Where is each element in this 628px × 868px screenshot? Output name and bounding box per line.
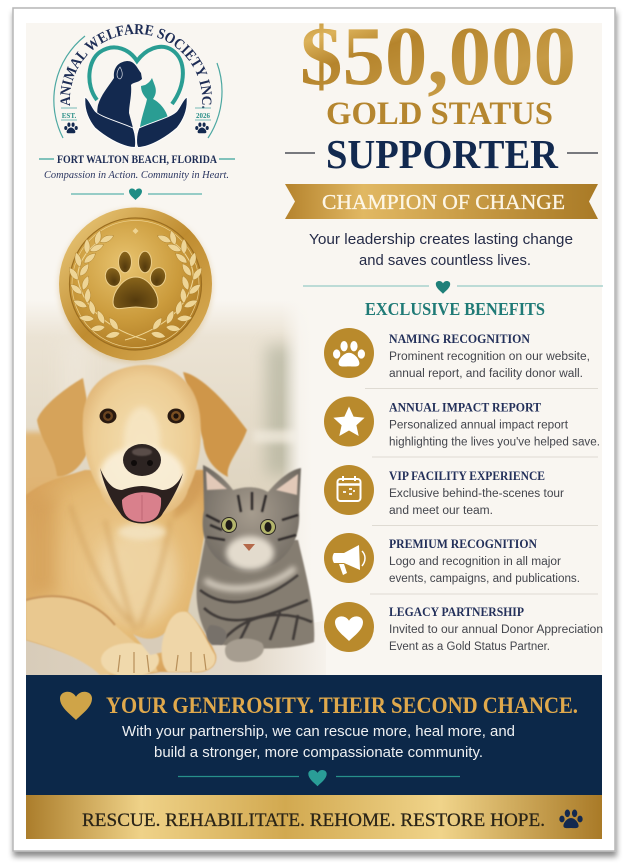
blanket between legs [133, 632, 166, 655]
banner text [122, 723, 515, 761]
logo est: 2026 [196, 112, 210, 120]
photo: golden retriever and tabby cat [22, 300, 326, 677]
benefit: legacy partnership: Invited to our annual Donor Appreciation [389, 624, 603, 636]
banner text: With your partnership, we can rescue more, heal more, and [122, 723, 515, 740]
logo est: EST. [62, 112, 76, 120]
gold medal [58, 208, 212, 363]
icon: heart [335, 616, 363, 641]
benefit: vip facility experience: Exclusive behind-the-scenes tour [389, 488, 564, 500]
logo cat [140, 78, 169, 127]
cat [197, 465, 314, 662]
leadership statement: Your leadership creates lasting change [309, 231, 573, 248]
benefit: naming recognition: NAMING RECOGNITION [389, 332, 530, 346]
benefit: premium recognition [324, 533, 580, 585]
dog head [83, 365, 201, 518]
dog eyes [100, 408, 116, 424]
benefit: vip facility experience: and meet our team. [389, 505, 493, 517]
medal paw [103, 251, 168, 309]
banner text: build a stronger, more compassionate community. [154, 744, 483, 761]
medal laurel [67, 230, 146, 340]
banner heading: YOUR GENEROSITY. THEIR SECOND CHANCE. [106, 693, 578, 718]
title: $50,000: $50,000 [300, 10, 576, 103]
benefit: annual impact report: ANNUAL IMPACT REPORT [389, 400, 542, 414]
gold motto band: RESCUE. REHABILITATE. REHOME. RESTORE HOPE. [82, 810, 545, 831]
heart divider: logo [71, 189, 202, 200]
ribbon: champion of change [285, 184, 598, 219]
logo heart outline [89, 47, 183, 104]
logo: Animal Welfare Society [39, 24, 235, 200]
logo arc text: ANIMAL WELFARE SOCIETY INC. [60, 24, 212, 108]
icon: navy paw [559, 810, 583, 828]
title: gold status: GOLD STATUS [326, 96, 553, 132]
icon: star [333, 406, 365, 436]
logo paws [64, 122, 209, 133]
benefit: premium recognition: Logo and recognition in all major [389, 556, 561, 568]
location line: FORT WALTON BEACH, FLORIDA [57, 152, 217, 166]
icon: calendar [338, 476, 360, 501]
dog [26, 365, 247, 677]
logo dog [97, 61, 142, 128]
icon: gold heart [60, 692, 92, 720]
title: supporter with rules: SUPPORTER [326, 131, 558, 177]
benefit: annual impact report: Personalized annual impact report [389, 420, 569, 432]
dog right foreleg [162, 612, 215, 672]
benefit: naming recognition: Prominent recognition on our website, [389, 351, 590, 363]
logo outer arcs [54, 36, 222, 138]
benefit: annual impact report [324, 396, 600, 448]
ribbon: champion of change: CHAMPION OF CHANGE [322, 190, 565, 214]
medal star [132, 228, 138, 234]
benefit: legacy partnership: LEGACY PARTNERSHIP [389, 605, 524, 619]
navy banner [26, 675, 602, 795]
icon: megaphone [332, 545, 365, 575]
heart divider: benefits [303, 281, 603, 294]
benefit: premium recognition: PREMIUM RECOGNITION [389, 537, 537, 551]
benefit: vip facility experience [324, 465, 564, 517]
gold motto band [26, 795, 602, 839]
benefit: legacy partnership [324, 602, 603, 653]
dog left foreleg [26, 596, 158, 675]
heading: exclusive benefits: EXCLUSIVE BENEFITS [365, 299, 545, 319]
banner heart divider [178, 770, 460, 786]
icon: paw [333, 341, 365, 367]
benefit: naming recognition [324, 328, 590, 380]
logo hands [85, 97, 187, 148]
blanket [148, 622, 319, 675]
benefit: naming recognition: annual report, and facility donor wall. [389, 368, 583, 380]
benefit: premium recognition: events, campaigns, and publications. [389, 573, 580, 585]
dog mouth [100, 468, 183, 524]
benefit: legacy partnership: Event as a Gold Status Partner. [389, 641, 550, 653]
leadership statement: and saves countless lives. [359, 252, 531, 269]
leadership statement [309, 231, 573, 269]
benefit: vip facility experience: VIP FACILITY EXPERIENCE [389, 469, 545, 483]
dog nose [123, 444, 161, 476]
benefit: annual impact report: highlighting the lives you've helped save. [389, 436, 600, 448]
logo est [61, 108, 211, 120]
dog ears [37, 378, 92, 476]
tagline: Compassion in Action. Community in Heart. [44, 170, 229, 181]
